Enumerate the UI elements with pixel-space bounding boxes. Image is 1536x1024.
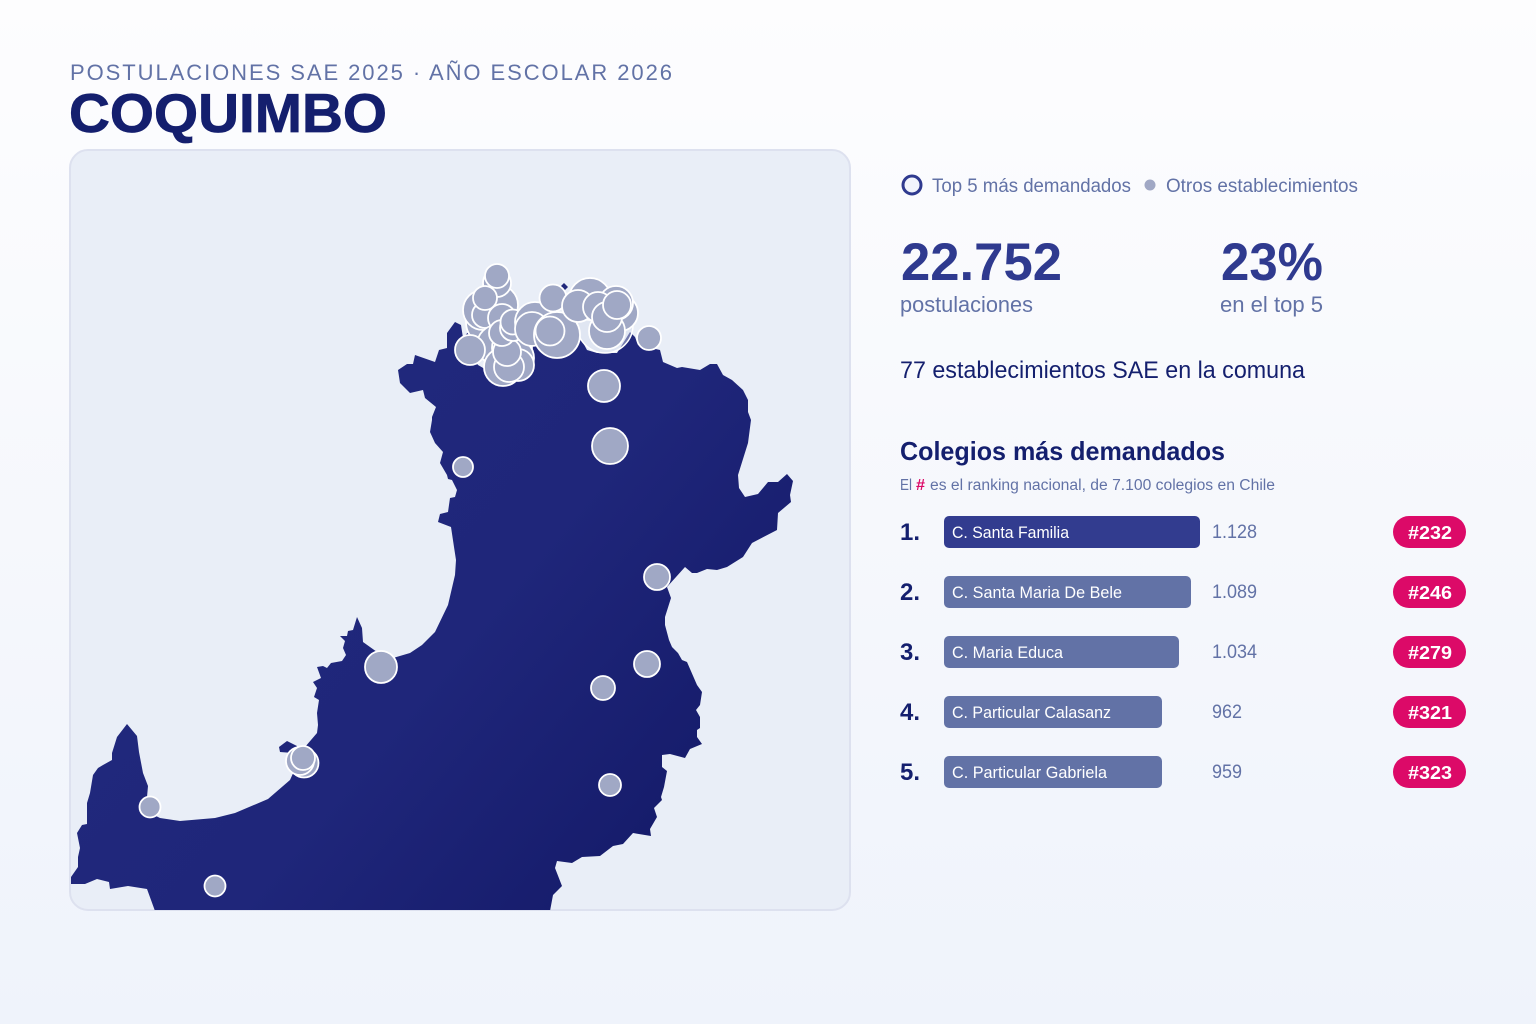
row 1: 1.128 bbox=[1212, 522, 1257, 543]
row 1: #232 bbox=[1408, 522, 1452, 543]
row 4: C. Particular Calasanz bbox=[952, 704, 1111, 722]
panel: map bbox=[70, 150, 850, 911]
title: COQUIMBO bbox=[69, 82, 387, 144]
ranking note: es el ranking nacional, de 7.100 colegios en Chile bbox=[930, 477, 1275, 494]
row 3: #279 bbox=[1408, 642, 1452, 663]
legend bbox=[903, 176, 1358, 197]
ranking note: El bbox=[900, 477, 912, 494]
row 4: 4. bbox=[900, 699, 920, 726]
row 4: 962 bbox=[1212, 702, 1242, 723]
legend: top 5 ring bbox=[903, 176, 921, 194]
map: island bbox=[279, 741, 297, 753]
row 3: 3. bbox=[900, 639, 920, 666]
map: commune shape bbox=[71, 310, 793, 911]
row 2: 2. bbox=[900, 579, 920, 606]
stat: postulaciones: postulaciones bbox=[900, 292, 1033, 317]
row 1 bbox=[900, 516, 1466, 548]
ranking note: # bbox=[916, 477, 925, 494]
row 5: #323 bbox=[1408, 762, 1452, 783]
legend: others label: Otros establecimientos bbox=[1166, 176, 1358, 197]
ranking heading: Colegios más demandados bbox=[900, 436, 1225, 466]
subtitle: POSTULACIONES SAE 2025 · AÑO ESCOLAR 2026 bbox=[70, 60, 672, 85]
row 2: #246 bbox=[1408, 582, 1452, 603]
row 2: 1.089 bbox=[1212, 582, 1257, 603]
stat: top 5 share: en el top 5 bbox=[1220, 292, 1323, 317]
row 3: 1.034 bbox=[1212, 642, 1257, 663]
row 3 bbox=[900, 636, 1466, 668]
row 4 bbox=[900, 696, 1466, 728]
row 2: C. Santa Maria De Bele bbox=[952, 584, 1122, 602]
stat: top 5 share: 23% bbox=[1221, 233, 1323, 292]
row 1: 1. bbox=[900, 519, 920, 546]
establishments count: 77 establecimientos SAE en la comuna bbox=[900, 357, 1306, 384]
stat: postulaciones: 22.752 bbox=[901, 233, 1062, 292]
row 1: C. Santa Familia bbox=[952, 524, 1070, 542]
row 3: C. Maria Educa bbox=[952, 644, 1064, 662]
row 2 bbox=[900, 576, 1466, 608]
row 5: 959 bbox=[1212, 762, 1242, 783]
stat: top 5 share bbox=[1220, 233, 1323, 317]
row 5 bbox=[900, 756, 1466, 788]
map: islet bbox=[561, 283, 568, 290]
row 5: 5. bbox=[900, 759, 920, 786]
row 5: C. Particular Gabriela bbox=[952, 764, 1108, 782]
schools: northern cluster halo bbox=[578, 321, 634, 354]
stat: postulaciones bbox=[900, 233, 1062, 317]
schools: bubbles bbox=[140, 264, 670, 896]
row 4: #321 bbox=[1408, 702, 1452, 723]
legend: others dot bbox=[1144, 180, 1156, 190]
legend: top 5 label: Top 5 más demandados bbox=[932, 176, 1131, 197]
